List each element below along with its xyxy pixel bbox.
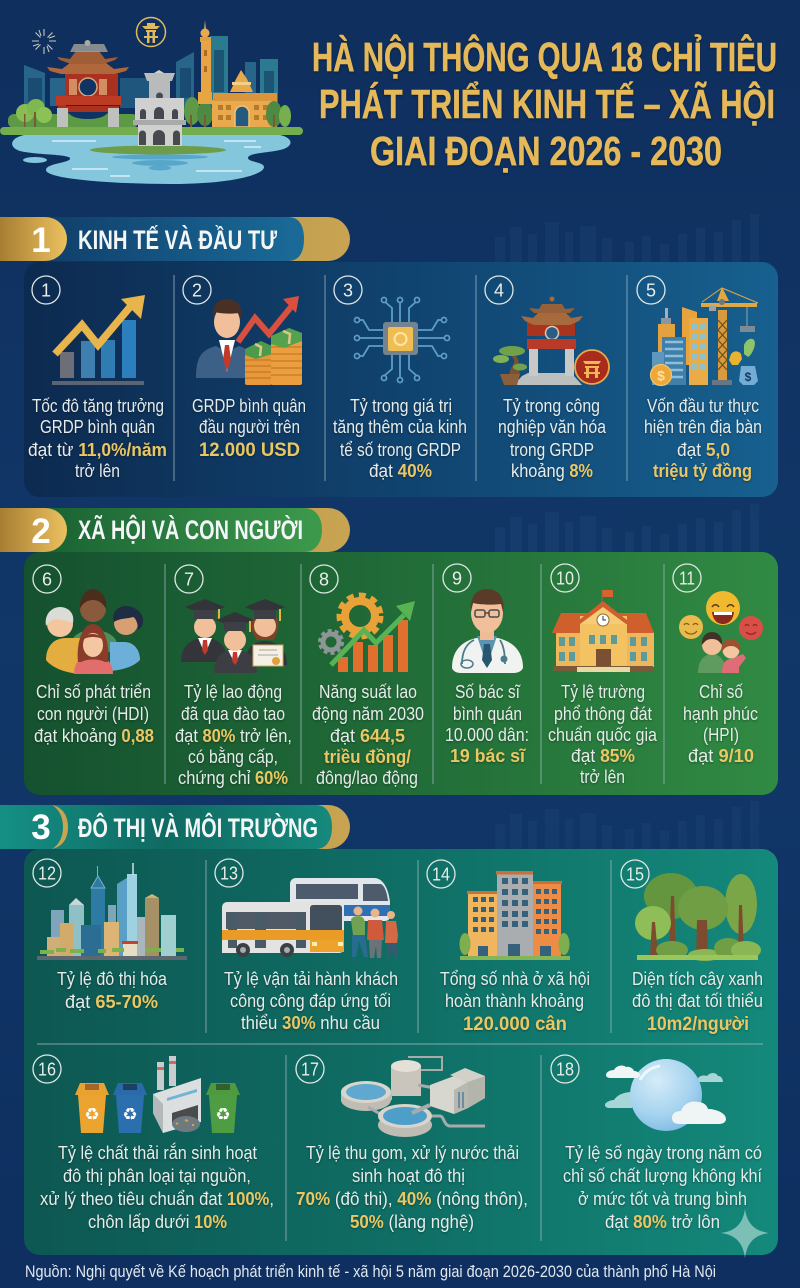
faint skyline chart behind heading 3 bbox=[495, 801, 759, 849]
text: HDI: Chỉ số phát triển bbox=[36, 682, 151, 702]
trees right bbox=[266, 101, 291, 127]
section 2 heading bar: XÃ HỘI VÀ CON NGƯỜI bbox=[78, 514, 303, 545]
text: air quality: đạt 80% trở lôn bbox=[605, 1212, 720, 1232]
icon: cultural pavilion, bonsai, medal bbox=[493, 296, 609, 385]
text: happiness index bbox=[683, 682, 758, 766]
icon: happiness emojis and family bbox=[679, 591, 763, 673]
text: investment capital: đạt 5,0 bbox=[677, 440, 730, 460]
text: national standard schools: Tỷ lệ trường bbox=[561, 682, 645, 702]
icon: construction investment: $ bbox=[745, 370, 752, 384]
section 3 heading bar: 3 bbox=[31, 808, 51, 847]
icon: four people bbox=[46, 589, 143, 674]
item 7 bbox=[175, 565, 292, 788]
text: cultural industry: khoảng 8% bbox=[511, 461, 593, 481]
icon: growth chart bbox=[52, 295, 145, 385]
Hoan Kiem lake bbox=[12, 135, 290, 184]
item 3: 3 bbox=[343, 280, 353, 300]
item 5 bbox=[637, 276, 762, 481]
trees left bbox=[8, 99, 138, 128]
text: investment capital: Vốn đầu tư thực bbox=[647, 396, 759, 416]
text: labour productivity bbox=[312, 682, 424, 788]
text: investment capital bbox=[644, 396, 762, 481]
icon: GRDP per capita businessman bbox=[196, 296, 302, 385]
text: cultural industry: Tỷ trong công bbox=[503, 396, 600, 416]
item 10: 10 bbox=[556, 568, 574, 588]
text: public transport bbox=[224, 969, 398, 1033]
text: investment capital: triệu tỷ đồng bbox=[653, 461, 752, 481]
faint skyline chart behind heading 1 bbox=[495, 214, 759, 262]
text: air quality: Tỷ lệ số ngày trong năm có bbox=[565, 1143, 762, 1163]
icon: recycling bins and plant: ♻ bbox=[84, 1105, 100, 1124]
icon: air quality globe and clouds bbox=[605, 1059, 726, 1131]
text: trained labour: đã qua đào tao bbox=[181, 704, 285, 724]
text: solid waste: chôn lấp dưới 10% bbox=[88, 1212, 227, 1232]
item 2 bbox=[183, 276, 306, 461]
illustration: Hanoi landmarks bbox=[0, 18, 303, 184]
text: air quality bbox=[563, 1143, 762, 1232]
item dividers bbox=[174, 275, 627, 481]
icon: construction investment: $ bbox=[657, 368, 665, 384]
text: labour productivity: đạt 644,5 bbox=[330, 726, 405, 746]
text: cultural industry bbox=[498, 396, 607, 481]
item 16: 16 bbox=[38, 1060, 56, 1080]
text: solid waste: Tỷ lệ chất thải rắn sinh hoạt bbox=[58, 1142, 257, 1163]
item 4 bbox=[485, 276, 609, 481]
trees middle bbox=[184, 97, 213, 127]
icon: circuit chip bbox=[354, 298, 450, 382]
icon: productivity gears and bars bbox=[320, 595, 415, 672]
icon: graduates bbox=[181, 599, 287, 673]
item dividers bbox=[165, 564, 664, 784]
item 15 bbox=[621, 860, 763, 1035]
text: national standard schools: chuẩn quốc gia bbox=[548, 725, 658, 745]
item 17: 17 bbox=[301, 1060, 319, 1080]
icon: sparkle bbox=[721, 1209, 769, 1258]
text: trained labour: có bằng cấp, bbox=[188, 746, 278, 767]
text: HDI: đạt khoảng 0,88 bbox=[34, 726, 154, 746]
tower column and gold colonial building bbox=[198, 20, 277, 127]
text: wastewater: sinh hoạt đô thị bbox=[352, 1166, 465, 1186]
Khue Van Cac pavilion bbox=[47, 40, 129, 127]
text: wastewater bbox=[296, 1143, 528, 1232]
text: trained labour: chứng chỉ 60% bbox=[178, 768, 288, 788]
text: national standard schools: đạt 85% bbox=[571, 746, 635, 766]
icon: buses and passengers bbox=[222, 878, 398, 958]
panel: section 1 economy and investment bbox=[24, 262, 778, 497]
text: national standard schools bbox=[548, 682, 658, 787]
section 1 heading bar: 1 bbox=[31, 221, 51, 260]
item 10 bbox=[548, 564, 658, 787]
icon: Hanoi emblem bbox=[136, 18, 166, 46]
item 9: 9 bbox=[452, 568, 462, 588]
title bbox=[312, 34, 777, 174]
section 2 heading bar bbox=[0, 508, 350, 552]
text: urbanization: Tỷ lệ đô thị hóa bbox=[57, 969, 168, 989]
text: digital economy: đạt 40% bbox=[369, 461, 432, 481]
item 15: 15 bbox=[626, 864, 644, 884]
grass strip bbox=[0, 127, 303, 135]
panel: section 2 society and people bbox=[24, 552, 778, 795]
icon: city skyline bbox=[37, 863, 187, 960]
text: trained labour: Tỷ lệ lao động bbox=[184, 682, 282, 702]
text: social housing bbox=[440, 969, 590, 1035]
text: social housing: hoàn thành khoảng bbox=[445, 991, 584, 1011]
text: growth rate bbox=[28, 396, 167, 481]
text: happiness index: đạt 9/10 bbox=[688, 746, 754, 766]
item 5: 5 bbox=[646, 280, 656, 300]
item 6: 6 bbox=[42, 570, 52, 590]
text: public transport: công công đáp ứng tối bbox=[230, 991, 391, 1011]
text: green area: Diện tích cây xanh bbox=[632, 969, 763, 989]
panel: section 3 urban and environment bbox=[24, 849, 778, 1258]
icon: construction investment bbox=[650, 287, 758, 386]
icon: recycling bins and plant: ♻ bbox=[215, 1105, 231, 1124]
item 4: 4 bbox=[494, 280, 504, 300]
item 13 bbox=[215, 859, 398, 1033]
item 18: 18 bbox=[556, 1060, 574, 1080]
text: green area: 10m2/người bbox=[647, 1014, 749, 1035]
text: digital economy: tăng thêm của kinh bbox=[333, 417, 467, 437]
text: national standard schools: trở lên bbox=[580, 767, 625, 787]
text: wastewater: 50% (làng nghệ) bbox=[350, 1212, 474, 1232]
item 1 bbox=[28, 276, 167, 481]
text: social housing: 120.000 cân bbox=[463, 1014, 567, 1035]
text: urbanization: đạt 65-70% bbox=[65, 992, 158, 1012]
text: doctors: 19 bác sĩ bbox=[450, 746, 526, 766]
text: doctors: Số bác sĩ bbox=[455, 682, 521, 702]
text: GRDP per capita bbox=[192, 396, 306, 461]
text: green area: đô thị đat tối thiểu bbox=[632, 991, 763, 1011]
item 1: 1 bbox=[41, 280, 51, 300]
text: GRDP per capita: đầu người trên bbox=[199, 417, 300, 437]
text: GRDP per capita: GRDP bình quân bbox=[192, 396, 306, 416]
item 7: 7 bbox=[184, 570, 194, 590]
section 2 heading bar: 2 bbox=[31, 512, 51, 551]
text: air quality: ở mức tốt và trung bình bbox=[578, 1189, 747, 1209]
item dividers bbox=[37, 860, 763, 1241]
icon: firework bbox=[32, 29, 56, 54]
text: public transport: thiểu 30% nhu cầu bbox=[241, 1013, 380, 1033]
icon: doctor bbox=[452, 589, 523, 673]
text: air quality: chỉ số chất lượng không khí bbox=[563, 1166, 762, 1186]
text: national standard schools: phổ thông đát bbox=[554, 704, 652, 724]
item 12: 12 bbox=[38, 864, 56, 884]
text: doctors: 10.000 dân: bbox=[445, 725, 529, 745]
icon: trees bbox=[635, 873, 761, 961]
text: happiness index: (HPI) bbox=[703, 725, 739, 745]
text: growth rate: GRDP bình quân bbox=[40, 417, 155, 437]
text: digital economy: tể số trong GRDP bbox=[340, 440, 461, 460]
text: happiness index: Chỉ số bbox=[699, 682, 743, 702]
text: growth rate: trở lên bbox=[75, 461, 120, 481]
section 3 heading bar bbox=[0, 805, 350, 849]
text: trained labour: đạt 80% trở lên, bbox=[175, 726, 292, 746]
icon: recycling bins and plant bbox=[75, 1056, 240, 1133]
text: solid waste: đô thị phân loại tại nguồn, bbox=[63, 1166, 251, 1186]
text: solid waste bbox=[40, 1142, 274, 1232]
item 12 bbox=[33, 859, 187, 1012]
item 14 bbox=[427, 860, 590, 1035]
item 6 bbox=[33, 565, 154, 746]
item 17 bbox=[296, 1055, 528, 1232]
item 16 bbox=[33, 1055, 274, 1232]
item 18 bbox=[551, 1055, 762, 1232]
text: growth rate: đạt từ 11,0%/năm bbox=[28, 440, 167, 460]
skyline windows bbox=[28, 50, 274, 102]
text: doctors bbox=[445, 682, 529, 766]
text: labour productivity: động năm 2030 bbox=[312, 704, 424, 724]
icon: wastewater treatment bbox=[341, 1057, 485, 1137]
item 2: 2 bbox=[192, 280, 202, 300]
text: HDI bbox=[34, 682, 154, 746]
text: cultural industry: nghiệp văn hóa bbox=[498, 417, 607, 437]
Turtle Tower bbox=[133, 70, 186, 146]
item 8: 8 bbox=[319, 570, 329, 590]
section 1 heading bar: KINH TẾ VÀ ĐẦU TƯ bbox=[78, 224, 277, 255]
item 13: 13 bbox=[220, 864, 238, 884]
faint skyline chart behind heading 2 bbox=[495, 504, 759, 552]
text: GRDP per capita: 12.000 USD bbox=[199, 440, 300, 461]
text: labour productivity: triều đồng/ bbox=[324, 747, 411, 767]
icon: apartment buildings bbox=[460, 871, 570, 960]
section 3 heading bar: ĐÔ THỊ VÀ MÔI TRƯỜNG bbox=[78, 812, 318, 843]
section 1 heading bar bbox=[0, 217, 350, 261]
text: labour productivity: Năng suất lao bbox=[319, 682, 417, 702]
item 14: 14 bbox=[432, 864, 450, 884]
text: urbanization bbox=[57, 969, 168, 1012]
text: doctors: bình quán bbox=[453, 704, 522, 724]
item 8 bbox=[310, 565, 424, 788]
item 11 bbox=[673, 564, 763, 766]
item 11: 11 bbox=[679, 568, 695, 588]
skyline bbox=[24, 36, 278, 108]
text: investment capital: hiện trên địa bàn bbox=[644, 417, 762, 437]
text: digital economy: Tỷ trong giá trị bbox=[350, 396, 452, 416]
icon: recycling bins and plant: ♻ bbox=[122, 1105, 138, 1124]
item 9 bbox=[443, 564, 529, 766]
text: social housing: Tổng số nhà ở xã hội bbox=[440, 969, 590, 989]
icon: school bbox=[552, 590, 654, 672]
text: growth rate: Tốc đô tăng trưởng bbox=[32, 396, 164, 416]
text: digital economy bbox=[333, 396, 467, 481]
text: wastewater: Tỷ lệ thu gom, xử lý nước thải bbox=[306, 1143, 519, 1163]
text: cultural industry: trong GRDP bbox=[510, 440, 594, 460]
text: public transport: Tỷ lệ vận tải hành khách bbox=[224, 969, 398, 989]
text: solid waste: xử lý theo tiêu chuẩn đat 100%, bbox=[40, 1189, 274, 1209]
text: trained labour bbox=[175, 682, 292, 788]
text: labour productivity: đông/lao động bbox=[316, 768, 418, 788]
text: wastewater: 70% (đô thi), 40% (nông thôn), bbox=[296, 1189, 528, 1209]
text: HDI: con người (HDI) bbox=[37, 704, 149, 724]
text: happiness index: hạnh phúc bbox=[683, 704, 758, 724]
item 3 bbox=[333, 276, 467, 481]
text: green area bbox=[632, 969, 763, 1035]
